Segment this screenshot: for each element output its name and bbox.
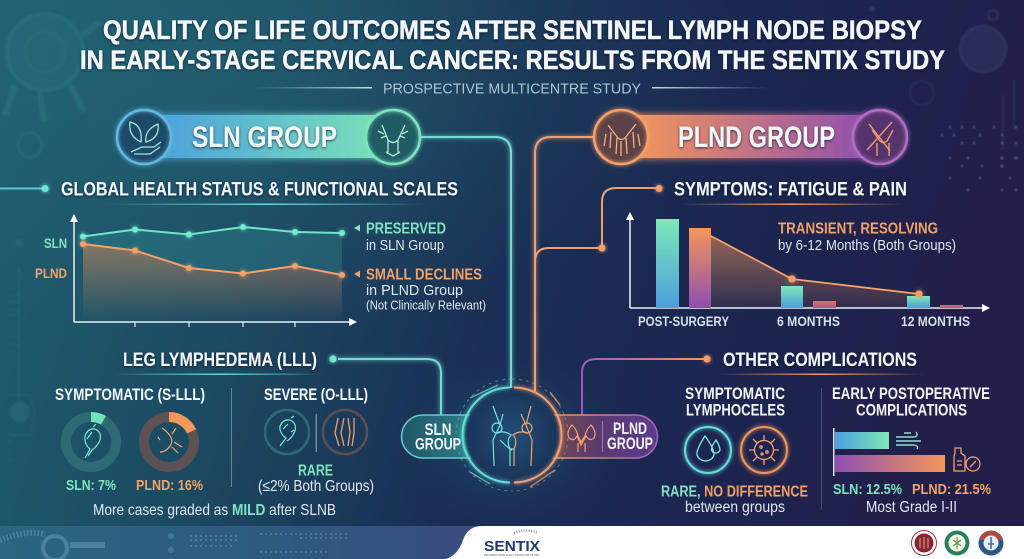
early postoperative complications: SLN: 12.5% bbox=[833, 481, 902, 498]
panel: symptoms fatigue and pain bbox=[626, 180, 990, 329]
callout: transient resolving: by 6-12 Months (Both Groups) bbox=[778, 237, 956, 254]
panel: global health status and functional scales bbox=[35, 180, 486, 327]
icon: droplets bbox=[685, 427, 731, 473]
icon: legs bbox=[323, 410, 367, 454]
bar chart: 12 MONTHS bbox=[901, 313, 970, 329]
symptomatic lymphoceles bbox=[661, 385, 808, 516]
icon: anatomy crossed out bbox=[853, 110, 907, 164]
heading bbox=[656, 180, 907, 205]
early postoperative complications: PLND: 21.5% bbox=[912, 481, 991, 498]
symptomatic S-LLL: SLN: 7% bbox=[66, 477, 116, 494]
title: IN EARLY-STAGE CERVICAL CANCER: RESULTS FROM THE SENTIX STUDY bbox=[80, 45, 945, 75]
footer bbox=[0, 526, 1024, 559]
heading: SYMPTOMS: FATIGUE & PAIN bbox=[674, 180, 907, 200]
donut: PLND 16% bbox=[144, 417, 194, 467]
callout: small declines: SMALL DECLINES bbox=[366, 266, 482, 284]
early postoperative complications: Most Grade I-II bbox=[866, 499, 957, 516]
panel: other complications bbox=[661, 350, 991, 516]
symptomatic S-LLL: SYMPTOMATIC (S-LLL) bbox=[55, 386, 205, 404]
bar chart bbox=[626, 212, 990, 329]
header pill: PLND group bbox=[594, 110, 907, 164]
heading bbox=[42, 180, 458, 205]
icon: bottle and gauge bbox=[954, 448, 980, 471]
pill: PLND group bbox=[553, 415, 658, 458]
pill: PLND group: PLND bbox=[613, 420, 647, 438]
heading: GLOBAL HEALTH STATUS & FUNCTIONAL SCALES bbox=[61, 180, 458, 200]
bar chart: POST-SURGERY bbox=[638, 313, 730, 329]
severe O-LLL: (≤2% Both Groups) bbox=[258, 478, 374, 495]
circle: right half orange bbox=[514, 388, 562, 483]
callout: preserved bbox=[354, 220, 446, 254]
label: PLND group: PLND GROUP bbox=[678, 121, 835, 154]
donut: SLN 7% bbox=[66, 417, 116, 467]
logo: blue and red seal bbox=[978, 530, 1004, 556]
circle: left half teal bbox=[462, 388, 510, 483]
pill: SLN group: GROUP bbox=[415, 436, 461, 454]
severe O-LLL bbox=[258, 386, 374, 495]
heading bbox=[704, 350, 925, 375]
symptomatic lymphoceles: LYMPHOCELES bbox=[686, 402, 785, 420]
logo: red seal bbox=[912, 530, 936, 556]
central hub: anatomy diagram with group pills bbox=[402, 379, 658, 491]
icon: pelvic anatomy bbox=[492, 406, 532, 466]
connectors bbox=[0, 137, 705, 415]
early postoperative complications bbox=[832, 385, 991, 516]
icon: lymph anatomy bbox=[366, 110, 420, 164]
subtitle: PROSPECTIVE MULTICENTRE STUDY bbox=[383, 80, 641, 98]
icon: head outline bbox=[265, 410, 309, 454]
callout: small declines: in PLND Group bbox=[366, 282, 463, 299]
line chart: PLND bbox=[35, 265, 67, 281]
pill: PLND group: GROUP bbox=[607, 435, 653, 453]
pill: SLN group: SLN bbox=[424, 421, 452, 439]
symptomatic lymphoceles: RARE, NO DIFFERENCE bbox=[661, 484, 808, 500]
pill: SLN group bbox=[402, 415, 471, 458]
early postoperative complications: COMPLICATIONS bbox=[856, 402, 967, 420]
icon: pelvic nodes bbox=[594, 110, 648, 164]
symptomatic lymphoceles: between groups bbox=[685, 499, 785, 516]
header pill: SLN group bbox=[117, 110, 420, 164]
note: graded mild: More cases graded as MILD after SLNB bbox=[93, 502, 336, 519]
icon: plant in hand bbox=[117, 110, 171, 164]
title: QUALITY OF LIFE OUTCOMES AFTER SENTINEL LYMPH NODE BIOPSY bbox=[103, 15, 922, 45]
icon: wind bbox=[896, 432, 921, 449]
callout: transient resolving bbox=[778, 220, 956, 254]
logo: green seal bbox=[944, 530, 970, 556]
symptomatic S-LLL: PLND: 16% bbox=[136, 477, 203, 494]
line chart bbox=[35, 214, 357, 327]
logo: SENTIX bbox=[484, 530, 540, 557]
title bbox=[80, 15, 945, 75]
symptomatic S-LLL bbox=[55, 386, 205, 494]
callout: preserved: PRESERVED bbox=[366, 220, 446, 238]
severe O-LLL: SEVERE (O-LLL) bbox=[264, 386, 368, 404]
callout: transient resolving: TRANSIENT, RESOLVING bbox=[778, 220, 938, 238]
label: SLN group: SLN GROUP bbox=[192, 121, 337, 154]
line chart: SLN bbox=[44, 235, 67, 251]
logo: SENTIX: SENTIX bbox=[484, 539, 540, 555]
logo: SENTIX: PROSPECTIVE DAILY MONITOR STUDY bbox=[484, 553, 540, 557]
icon: virus bbox=[741, 427, 787, 473]
bar chart: 6 MONTHS bbox=[777, 313, 840, 329]
panel: leg lymphedema bbox=[55, 350, 374, 519]
horizontal bar chart bbox=[833, 428, 945, 476]
callout: preserved: in SLN Group bbox=[366, 237, 444, 254]
heading: LEG LYMPHEDEMA (LLL) bbox=[123, 350, 317, 371]
severe O-LLL: RARE bbox=[298, 462, 333, 480]
callout: small declines: (Not Clinically Relevant) bbox=[366, 298, 486, 312]
early postoperative complications: EARLY POSTOPERATIVE bbox=[832, 385, 990, 403]
symptomatic lymphoceles: SYMPTOMATIC bbox=[685, 385, 785, 403]
heading: OTHER COMPLICATIONS bbox=[723, 350, 917, 371]
callout: small declines bbox=[354, 266, 486, 312]
